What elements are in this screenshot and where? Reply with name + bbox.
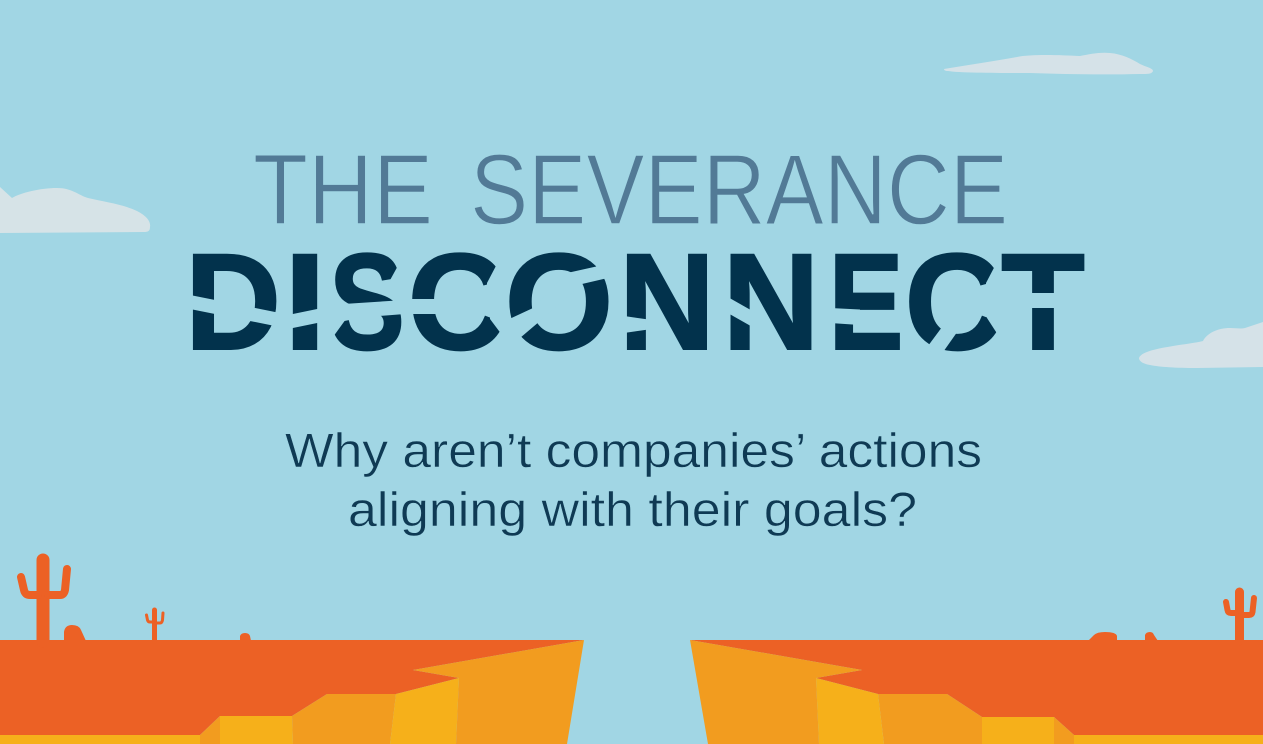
heading: disconnect: I — [284, 225, 326, 378]
heading: disconnect: N — [619, 225, 715, 378]
cloud: right — [1139, 322, 1263, 368]
heading: disconnect: O — [505, 226, 613, 379]
icon: rocks right — [1088, 632, 1158, 641]
heading: disconnect: C — [905, 226, 1003, 379]
right cliff — [690, 640, 1263, 744]
cloud: top right — [944, 53, 1153, 74]
title: the severance: SEVERANCE — [470, 134, 1008, 246]
title: the severance: THE — [253, 134, 433, 246]
heading: disconnect: C — [408, 226, 506, 379]
heading: disconnect: D — [185, 225, 281, 378]
heading: disconnect: T — [1001, 226, 1085, 379]
subtitle — [285, 425, 982, 537]
icon: large cactus left — [21, 560, 67, 641]
heading: disconnect: E — [829, 225, 903, 379]
title: the severance — [253, 134, 1008, 246]
heading: disconnect: S — [329, 225, 405, 378]
subtitle: Why aren’t companies’ actions — [285, 425, 982, 478]
icon: rocks left — [64, 625, 251, 641]
icon: small cactus left — [146, 610, 163, 641]
icon: cactus right — [1226, 592, 1254, 641]
heading: disconnect: N — [723, 225, 819, 378]
heading: disconnect — [185, 225, 1085, 379]
left cliff — [0, 640, 584, 744]
cloud: left — [0, 187, 150, 233]
subtitle: aligning with their goals? — [348, 484, 917, 537]
